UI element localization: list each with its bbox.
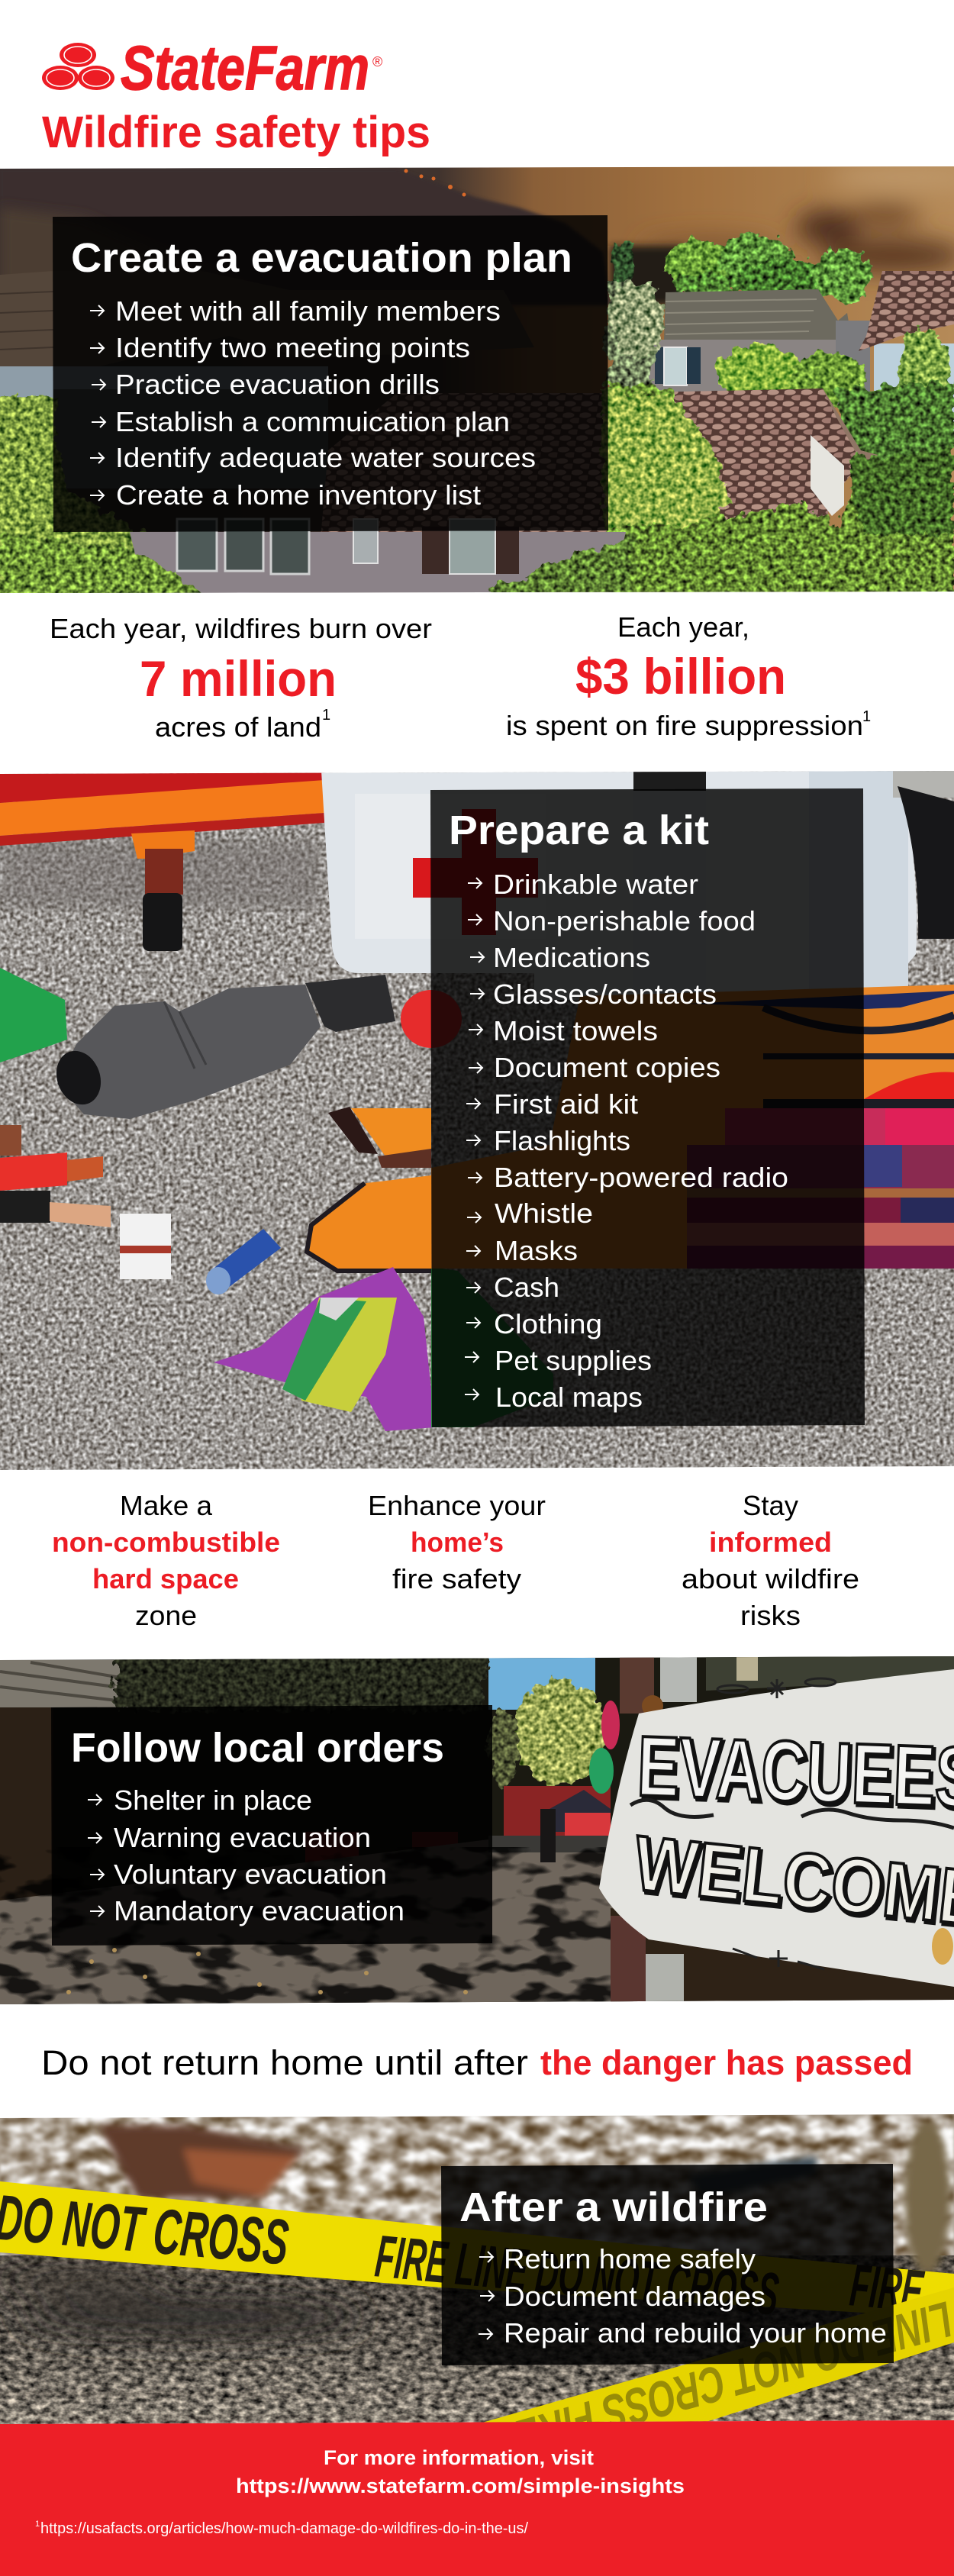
wordmark: StateFarm bbox=[121, 34, 369, 103]
blanket bbox=[431, 985, 954, 1269]
item: Glasses/contacts bbox=[493, 978, 717, 1010]
stat: acres burned: acres of land bbox=[155, 711, 321, 743]
panel: after a wildfire bbox=[0, 2114, 954, 2467]
tips row bbox=[52, 1490, 859, 1631]
umbrella bbox=[49, 975, 395, 1119]
tape one bbox=[0, 2181, 954, 2318]
banner lettering bbox=[630, 1718, 954, 1945]
list bbox=[465, 869, 788, 1413]
top right tile roof bbox=[874, 343, 954, 431]
orange vest bbox=[328, 1107, 378, 1154]
item: Battery-powered radio bbox=[494, 1162, 788, 1193]
tip: hard space zone: hard space bbox=[92, 1563, 239, 1594]
item: Create a home inventory list bbox=[116, 479, 481, 511]
person bbox=[540, 1809, 556, 1862]
title: Wildfire safety tips bbox=[42, 108, 430, 157]
photo: evacuees welcome banner bbox=[0, 1649, 954, 2007]
tip: hard space zone: zone bbox=[135, 1600, 197, 1631]
stat: acres burned: Each year, wildfires burn over bbox=[50, 613, 432, 644]
panel overlay with heading and list bbox=[51, 1705, 492, 1946]
more information: For more information, visit bbox=[324, 2446, 594, 2469]
post and pole bbox=[620, 1656, 654, 1714]
tip: home fire safety: fire safety bbox=[392, 1563, 521, 1594]
item: Voluntary evacuation bbox=[114, 1859, 387, 1890]
gray roof house bbox=[664, 289, 849, 340]
item: Warning evacuation bbox=[114, 1822, 371, 1853]
tip: home fire safety: home’s bbox=[411, 1527, 504, 1558]
tip: home fire safety bbox=[368, 1490, 546, 1594]
item: Document damages bbox=[504, 2281, 765, 2312]
stat: fire suppression cost: $3 billion bbox=[575, 648, 786, 704]
panel: prepare a kit bbox=[0, 767, 954, 1473]
stats section bbox=[50, 611, 871, 743]
stat: acres burned: 1 bbox=[322, 707, 330, 724]
item: Local maps bbox=[495, 1381, 643, 1413]
item: Document copies bbox=[494, 1052, 720, 1083]
heading: After a wildfire bbox=[459, 2184, 768, 2230]
callout: do not return home: the danger has passed bbox=[540, 2043, 913, 2082]
item: Return home safely bbox=[504, 2243, 756, 2275]
dark roofs left bbox=[0, 269, 534, 366]
item: Shelter in place bbox=[114, 1785, 312, 1816]
item: Mandatory evacuation bbox=[114, 1895, 404, 1926]
jugs bbox=[321, 771, 920, 1000]
item: Flashlights bbox=[494, 1125, 630, 1156]
small items left bbox=[0, 1125, 21, 1156]
tip: stay informed: informed bbox=[709, 1527, 832, 1558]
red bottle bbox=[401, 990, 462, 1048]
blue flashlight bbox=[208, 1229, 281, 1290]
sky and trees bbox=[488, 1658, 595, 1710]
tape two bbox=[472, 2287, 954, 2426]
item: Meet with all family members bbox=[115, 295, 501, 327]
item: Clothing bbox=[494, 1308, 602, 1340]
green center bbox=[601, 279, 954, 461]
faint figures bbox=[305, 1832, 359, 1878]
tents bbox=[504, 1786, 611, 1847]
footnote: https://usafacts.org/articles/how-much-damage-do-wildfires-do-in-the-us/ bbox=[40, 2520, 528, 2537]
ground bbox=[0, 1839, 633, 2007]
item: Medications bbox=[493, 942, 650, 973]
tip: hard space zone bbox=[52, 1490, 280, 1631]
tip: home fire safety: Enhance your bbox=[368, 1490, 546, 1521]
road flare bar bbox=[0, 771, 324, 803]
item: Whistle bbox=[495, 1198, 593, 1229]
first aid cross bbox=[413, 809, 538, 935]
stat: acres burned: 7 million bbox=[140, 650, 337, 707]
registered mark: ® bbox=[372, 54, 382, 69]
list bbox=[90, 295, 536, 511]
tip: stay informed: about wildfire bbox=[682, 1563, 859, 1594]
heading: Follow local orders bbox=[71, 1725, 444, 1771]
footer bbox=[0, 2420, 954, 2576]
dark box bbox=[51, 1705, 492, 1946]
banner bbox=[599, 1669, 954, 1987]
tip: hard space zone: non-combustible bbox=[52, 1527, 280, 1558]
red band bbox=[0, 2420, 954, 2576]
item bbox=[466, 1272, 559, 1303]
list bbox=[479, 2243, 887, 2349]
item: Identify adequate water sources bbox=[115, 442, 536, 473]
footnote: 1 bbox=[35, 2520, 40, 2529]
more information: https://www.statefarm.com/simple-insights bbox=[236, 2474, 685, 2497]
hanging bags bbox=[601, 1701, 620, 1749]
dark box bbox=[430, 788, 865, 1427]
panel overlay with heading and list bbox=[430, 788, 865, 1427]
more information bbox=[236, 2446, 685, 2497]
callout: do not return home bbox=[41, 2043, 913, 2082]
tip: stay informed: risks bbox=[740, 1600, 801, 1631]
tip: stay informed: Stay bbox=[743, 1490, 798, 1521]
panel overlay with heading and list bbox=[53, 215, 608, 532]
tip: stay informed bbox=[682, 1490, 859, 1631]
photo: fire line tape over burned rubble: DO NOT CROSS bbox=[0, 2181, 292, 2278]
stat: fire suppression cost: is spent on fire suppression bbox=[506, 710, 863, 741]
heading: Prepare a kit bbox=[449, 808, 709, 853]
tile roof bbox=[321, 388, 864, 538]
panel: follow local orders bbox=[0, 1649, 954, 2007]
foreground foliage bbox=[0, 382, 954, 611]
lower house bbox=[130, 532, 626, 595]
photo: fire line tape over burned rubble bbox=[0, 2114, 954, 2467]
list bbox=[88, 1785, 404, 1926]
heading: Create a evacuation plan bbox=[71, 235, 572, 281]
item: Cash bbox=[494, 1272, 559, 1303]
icon: three ovals bbox=[42, 43, 114, 90]
card bbox=[120, 1214, 171, 1279]
item: Drinkable water bbox=[493, 869, 698, 900]
stat: fire suppression cost bbox=[506, 611, 871, 741]
item: Practice evacuation drills bbox=[115, 369, 440, 400]
panel: create an evacuation plan bbox=[0, 165, 954, 611]
item: Masks bbox=[495, 1235, 578, 1266]
black bag bbox=[893, 771, 954, 798]
chain link base bbox=[611, 1908, 954, 2007]
item: First aid kit bbox=[494, 1088, 638, 1120]
item: Repair and rebuild your home bbox=[504, 2317, 887, 2349]
stat: fire suppression cost: 1 bbox=[862, 708, 871, 725]
dark box bbox=[53, 215, 608, 532]
item: Identify two meeting points bbox=[115, 332, 470, 363]
snack bag bbox=[214, 1267, 553, 1431]
photo: houses and wildfire smoke bbox=[0, 165, 954, 611]
photo: fire line tape over burned rubble: LINE DO NOT CROSS FIRE bbox=[509, 2291, 954, 2467]
item: Establish a commuication plan bbox=[115, 406, 510, 437]
item: Non-perishable food bbox=[493, 905, 756, 937]
item: Moist towels bbox=[493, 1015, 658, 1046]
roof left bbox=[0, 1660, 149, 1707]
logo: State Farm bbox=[42, 34, 382, 103]
photo: emergency kit items on gravel bbox=[0, 767, 954, 1473]
dark box bbox=[441, 2164, 894, 2365]
panel overlay with heading and list bbox=[441, 2164, 894, 2365]
stat: acres burned bbox=[50, 613, 432, 743]
green bag bbox=[0, 968, 67, 1062]
item: Pet supplies bbox=[495, 1345, 652, 1376]
stat: fire suppression cost: Each year, bbox=[617, 611, 749, 643]
tip: hard space zone: Make a bbox=[120, 1490, 213, 1521]
callout: do not return home: Do not return home until after bbox=[41, 2043, 528, 2082]
